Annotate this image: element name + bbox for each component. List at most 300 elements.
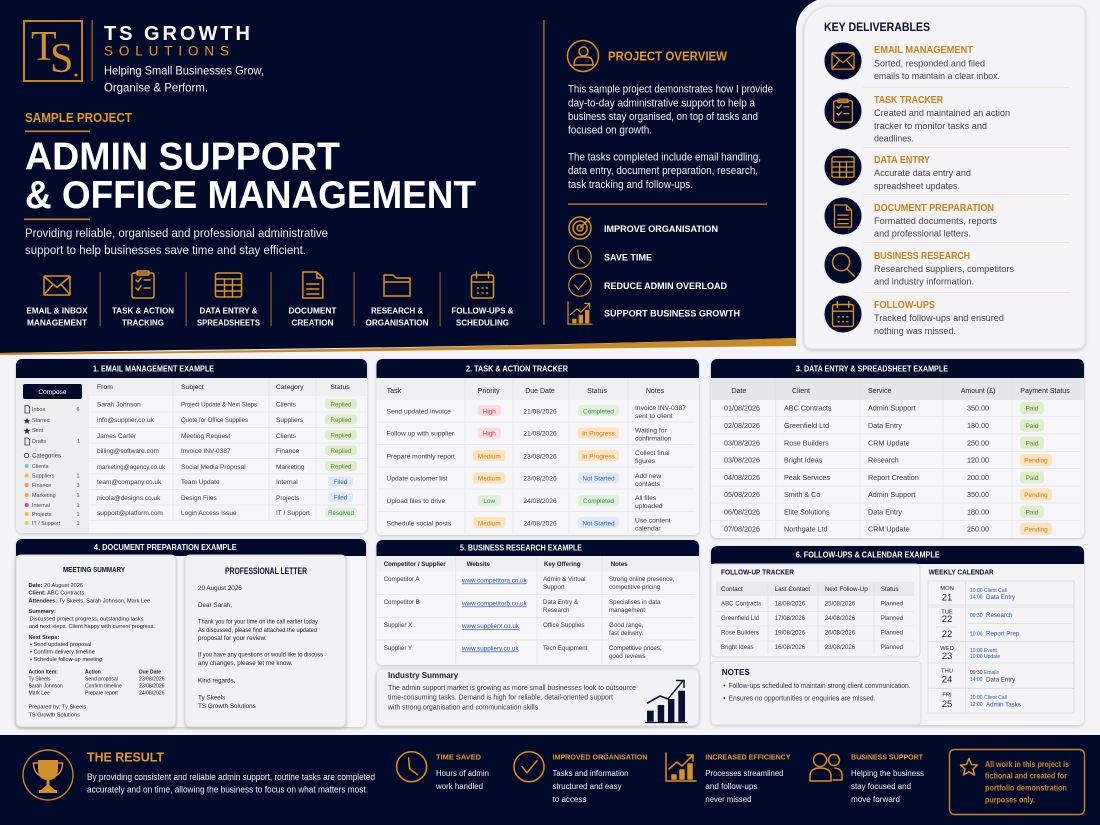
task table: 24/08/2026 — [523, 498, 557, 505]
result: business support: BUSINESS SUPPORT — [851, 752, 924, 761]
spreadsheet table: Report Creation — [868, 473, 919, 482]
meeting summary card: Prepared by: Ty Skeels — [28, 704, 86, 710]
panel 1: email management — [16, 359, 367, 533]
meeting summary card: • Schedule follow-up meeting — [30, 657, 102, 663]
result: improved organisation: structured and easy — [552, 782, 622, 791]
calendar events: Client Call — [984, 588, 1007, 594]
research table: Competitor B — [384, 599, 420, 606]
weekly calendar — [928, 568, 1074, 713]
priority and status pills: Completed — [583, 408, 614, 415]
deliverable text: FOLLOW-UPS — [874, 300, 935, 311]
sidebar — [16, 378, 89, 533]
calendar events: 10:00 — [970, 588, 983, 594]
result: time saved: TIME SAVED — [436, 752, 481, 761]
email table: Subject — [181, 384, 204, 391]
deliverable text: Accurate data entry and — [874, 168, 971, 178]
notes column: Add new — [635, 473, 661, 480]
icon: email — [832, 53, 854, 69]
research table: fast delivery. — [609, 630, 644, 637]
icon: person — [568, 40, 598, 72]
meeting summary card: Next Steps: — [28, 635, 59, 641]
meeting summary card: TS Growth Solutions — [28, 712, 80, 718]
priority and status pills: Not Started — [582, 476, 615, 483]
priority and status pills: Medium — [478, 453, 501, 460]
sidebar: Compose — [38, 389, 67, 396]
task table: 23/08/2026 — [523, 453, 557, 460]
website links: www.competitora.co.uk — [461, 578, 528, 584]
deliverable text: spreadsheet updates. — [874, 181, 960, 191]
panel: key deliverables — [804, 6, 1085, 349]
icon: task — [834, 99, 852, 122]
professional letter card: proposal for your review. — [198, 635, 267, 642]
follow-up tracker: Planned — [881, 630, 903, 636]
follow-up tracker: 23/08/2026 — [825, 644, 856, 651]
notes column: uploaded — [635, 503, 663, 510]
task table: Send updated invoice — [386, 408, 451, 415]
overview text: This sample project demonstrates how I provide — [568, 84, 773, 96]
deliverable text — [874, 45, 1014, 336]
status pills: Replied — [331, 432, 352, 440]
result: improved organisation — [514, 752, 648, 804]
spreadsheet table: CRM Update — [868, 438, 910, 447]
icon: spreadsheet — [216, 273, 242, 297]
brand name: Helping Small Businesses Grow, — [104, 64, 264, 78]
sidebar: Internal — [32, 503, 50, 509]
sidebar: Finance — [32, 483, 51, 489]
research table: Notes — [611, 561, 628, 568]
research table: Research — [543, 607, 570, 614]
notes column: Use content — [635, 518, 671, 524]
spreadsheet table: Client — [792, 388, 810, 395]
calendar events: 14:00 — [970, 677, 983, 683]
professional letter card: Ty Skeels — [198, 694, 225, 702]
benefit list: IMPROVE ORGANISATION — [604, 223, 718, 234]
meeting summary card: Confirm timeline — [85, 684, 122, 690]
icon: search — [833, 254, 854, 276]
email table: support@platform.com — [97, 510, 163, 517]
result: improved organisation: to access — [552, 795, 586, 804]
sidebar: 3 — [76, 483, 80, 489]
notes column: confirmation — [635, 436, 672, 442]
notes column: calendar — [635, 526, 661, 532]
icon: growth chart — [645, 680, 687, 722]
service labels: SCHEDULING — [456, 318, 509, 328]
email table: Status — [330, 384, 350, 391]
panel header: 4. DOCUMENT PREPARATION EXAMPLE — [94, 542, 237, 552]
research table: Website — [467, 561, 491, 568]
email table: Marketing — [276, 464, 305, 471]
disclaimer box: portfolio demonstration — [985, 784, 1067, 792]
notes column — [635, 405, 686, 532]
deliverable text: deadlines. — [874, 134, 914, 144]
status pills: Filed — [334, 479, 348, 486]
calendar days: 22 — [942, 629, 952, 640]
priority and status pills: High — [483, 431, 496, 438]
email table: Sarah Johnson — [97, 402, 141, 408]
research table — [377, 556, 699, 664]
research table: competitive pricing — [609, 584, 661, 591]
notes: Ensures no opportunities or enquiries are missed. — [728, 694, 876, 703]
research table: Competitive prices, — [609, 645, 662, 652]
sample project label — [25, 110, 132, 132]
task table: Schedule social posts — [386, 520, 452, 527]
task table: 21/08/2026 — [523, 408, 557, 415]
status pills: Resolved — [328, 510, 354, 517]
spreadsheet table: Peak Services — [784, 473, 830, 482]
result: increased efficiency: Processes streamlined — [705, 769, 783, 778]
industry summary: The admin support market is growing as more small businesses look to outsource — [388, 683, 636, 692]
notes: Follow-ups scheduled to maintain strong client communication. — [728, 681, 910, 690]
brand name: SOLUTIONS — [104, 44, 229, 58]
spreadsheet table: Rose Builders — [784, 438, 829, 447]
task table — [377, 378, 699, 533]
panel 6: follow-ups and calendar — [711, 546, 1084, 725]
task table: 24/08/2026 — [523, 520, 557, 527]
result: improved organisation: IMPROVED ORGANISATION — [552, 752, 648, 761]
meeting summary card: MEETING SUMMARY — [63, 565, 125, 574]
result: time saved: work handled — [435, 782, 483, 791]
follow-up tracker: Bright Ideas — [721, 644, 754, 651]
disclaimer box: purposes only. — [985, 796, 1035, 804]
sidebar: 6 — [76, 407, 80, 413]
website links: www.supplierx.co.uk — [461, 623, 520, 630]
task table: 23/08/2026 — [523, 476, 557, 483]
service labels: FOLLOW-UPS & — [452, 306, 514, 316]
payment pills: Pending — [1024, 527, 1048, 534]
icon: calendar — [833, 302, 853, 326]
website links — [461, 578, 528, 652]
email table: info@supplier.co.uk — [97, 417, 155, 424]
task table: Due Date — [525, 388, 555, 395]
follow-up tracker: 19/08/2026 — [775, 630, 806, 636]
spreadsheet table: Amount (£) — [961, 388, 995, 395]
panel header: 6. FOLLOW-UPS & CALENDAR EXAMPLE — [796, 550, 940, 560]
payment pills: Paid — [1026, 440, 1039, 447]
notes column: All files — [635, 495, 657, 502]
deliverable text: emails to maintain a clear inbox. — [874, 71, 1000, 81]
follow-up tracker: Greenfield Ltd — [721, 615, 759, 622]
spreadsheet table: Smith & Co — [784, 490, 820, 499]
sidebar: Marketing — [32, 493, 56, 499]
spreadsheet table: 06/08/2026 — [724, 507, 760, 516]
priority and status pills: Medium — [478, 520, 501, 527]
industry summary: Industry Summary — [388, 671, 459, 680]
result text: accurately and on time, allowing the business to focus on what matters most. — [87, 784, 368, 794]
email table: Project Update & Next Steps — [181, 402, 258, 408]
description: Providing reliable, organised and professional administrative — [25, 226, 328, 240]
meeting summary card: Due Date — [139, 670, 161, 676]
email table: Team Update — [181, 479, 220, 486]
sidebar: Starred — [32, 418, 50, 424]
research table: Admin & Virtual — [543, 576, 586, 583]
email table: Meeting Request — [181, 433, 230, 440]
calendar events: 10:00 — [970, 648, 983, 654]
spreadsheet table: 250.00 — [967, 525, 989, 534]
research table: Good range, — [609, 622, 644, 629]
brand name — [104, 23, 264, 94]
industry summary: with strong organisation and communication skills. — [387, 702, 540, 712]
service labels: TASK & ACTION — [112, 306, 174, 316]
task table: Follow up with supplier — [386, 431, 455, 438]
result: time saved — [397, 752, 489, 791]
calendar events: Client Call — [984, 695, 1007, 701]
deliverable text: Sorted, responded and filed — [874, 58, 985, 68]
calendar events: Research — [986, 612, 1013, 619]
website links: www.competitorb.co.uk — [461, 600, 528, 608]
research table: good reviews — [609, 653, 645, 660]
priority and status pills: In Progress — [582, 431, 615, 438]
service labels — [26, 306, 514, 328]
payment pills: Pending — [1024, 458, 1048, 465]
overview text: The tasks completed include email handling, — [568, 152, 761, 164]
email table: From — [97, 384, 113, 391]
notes column: figures — [635, 458, 656, 465]
spreadsheet table — [711, 378, 1084, 537]
professional letter card: If you have any questions or would like to discuss — [198, 652, 323, 658]
logo: T — [31, 24, 57, 70]
meeting summary card: Sarah Johnson — [28, 684, 63, 690]
panel header — [16, 539, 366, 556]
follow-up tracker: FOLLOW-UP TRACKER — [721, 568, 794, 576]
benefit list: SAVE TIME — [604, 252, 652, 262]
follow-up tracker — [711, 564, 920, 657]
deliverable text: DATA ENTRY — [874, 155, 930, 166]
deliverable text: and industry information. — [874, 276, 974, 286]
spreadsheet table: Service — [868, 388, 891, 395]
follow-up tracker: 17/08/2026 — [775, 615, 806, 622]
panel header — [711, 546, 1084, 564]
priority and status pills: Completed — [583, 498, 614, 505]
service labels: MANAGEMENT — [27, 318, 88, 328]
sidebar: Categories — [32, 454, 61, 460]
brand name: Organise & Perform. — [104, 80, 208, 94]
overview text — [568, 84, 773, 191]
overview text: data entry, document preparation, research, — [568, 165, 758, 177]
disclaimer box: All work in this project is — [985, 760, 1069, 769]
deliverable text: Tracked follow-ups and ensured — [874, 313, 1004, 323]
follow-up tracker: Planned — [881, 644, 903, 651]
task table: Status — [587, 388, 607, 395]
research table: Office Supplies — [543, 622, 585, 629]
description: support to help businesses save time and stay efficient. — [25, 243, 306, 257]
deliverable text: Formatted documents, reports — [874, 216, 997, 226]
email table: Clients — [276, 433, 297, 440]
spreadsheet table: Northgate Ltd — [784, 525, 828, 534]
deliverable text: BUSINESS RESEARCH — [874, 251, 970, 262]
status pills — [325, 399, 357, 518]
result heading: THE RESULT — [87, 750, 164, 765]
meeting summary card — [16, 555, 176, 727]
meeting summary card: 23/08/2026 — [139, 676, 165, 682]
panel header — [376, 540, 699, 556]
spreadsheet table: 03/08/2026 — [724, 456, 760, 465]
result: business support: stay focused and — [851, 782, 911, 791]
industry summary: time-consuming tasks. Demand is high for reliable, detail-oriented support — [388, 692, 614, 702]
task table: 21/08/2026 — [523, 431, 557, 438]
spreadsheet table: Admin Support — [868, 404, 916, 413]
sidebar: Drafts — [32, 439, 47, 445]
email table: billing@software.com — [97, 448, 159, 455]
weekly calendar: WEEKLY CALENDAR — [929, 568, 994, 576]
result: increased efficiency: INCREASED EFFICIENCY — [705, 752, 791, 761]
panel 3: data entry — [711, 359, 1084, 538]
spreadsheet table: 02/08/2026 — [724, 421, 760, 430]
professional letter card: Thank you for your time on the call earlier today. — [198, 618, 319, 626]
service labels: CREATION — [292, 318, 334, 328]
follow-up tracker: Planned — [881, 600, 903, 608]
meeting summary card: Ty Skeels — [28, 676, 51, 682]
calendar events: 10:00 — [970, 695, 983, 701]
panel header — [376, 359, 699, 378]
result: increased efficiency: and follow-ups — [705, 782, 757, 791]
spreadsheet table: 07/08/2026 — [724, 525, 760, 534]
calendar events: Update — [984, 654, 1000, 660]
sample project label: SAMPLE PROJECT — [25, 110, 132, 125]
sidebar: Clients — [32, 464, 49, 470]
spreadsheet table: 350.00 — [967, 404, 989, 413]
follow-up tracker: 18/08/2026 — [775, 600, 806, 608]
deliverable text: tracker to monitor tasks and — [874, 121, 987, 131]
service labels: EMAIL & INBOX — [26, 306, 88, 316]
email table: Login Access Issue — [181, 510, 237, 517]
panel 5: business research — [376, 540, 699, 665]
calendar days: TUE — [941, 610, 953, 616]
email table: Finance — [276, 448, 300, 455]
header background — [0, 0, 817, 355]
icon: document — [303, 272, 323, 298]
spreadsheet table: Admin Support — [868, 490, 916, 499]
calendar events: 09:30 — [970, 670, 983, 676]
spreadsheet table: Bright Ideas — [784, 456, 823, 465]
result text: By providing consistent and reliable admin support, routine tasks are completed — [87, 772, 375, 782]
panel header: 2. TASK & ACTION TRACKER — [466, 364, 569, 374]
email table: Quote for Office Supplies — [181, 417, 249, 424]
overview text: day-to-day administrative support to help a — [568, 98, 755, 110]
spreadsheet table: Elite Solutions — [784, 507, 830, 516]
spreadsheet table: 200.00 — [967, 473, 989, 482]
service labels: DATA ENTRY & — [200, 306, 258, 316]
sidebar: 1 — [76, 521, 80, 527]
calendar events: Admin Tasks — [986, 702, 1021, 708]
professional letter card: Dear Sarah, — [198, 602, 232, 609]
logo — [24, 20, 93, 82]
spreadsheet table: 180.00 — [967, 421, 989, 430]
result: improved organisation: Tasks and information — [552, 769, 628, 778]
notes column: Collect final — [635, 450, 670, 457]
follow-up tracker: Rose Builders — [721, 630, 759, 636]
email table — [89, 378, 367, 520]
follow-up tracker: ABC Contracts — [721, 600, 761, 608]
icon: folder — [384, 275, 410, 296]
sidebar: Suppliers — [32, 474, 55, 480]
email table: Social Media Proposal — [181, 464, 246, 471]
follow-up tracker: 24/08/2026 — [825, 615, 856, 622]
meeting summary card: Date: 20 August 2026 — [28, 583, 83, 589]
panel: key deliverables: KEY DELIVERABLES — [824, 22, 930, 34]
research table: Strong online presence, — [609, 576, 675, 583]
calendar days: 25 — [942, 699, 952, 710]
sidebar: 1 — [76, 503, 80, 509]
notes: • — [723, 681, 726, 690]
notes column: sent to client — [635, 413, 673, 420]
sidebar: 1 — [77, 439, 80, 445]
email table: nicola@designs.co.uk — [97, 495, 161, 502]
meeting summary card: Send proposal — [85, 676, 118, 682]
result: business support: move forward — [851, 795, 900, 804]
icon: calendar — [472, 272, 494, 298]
notes column: Waiting for — [635, 428, 667, 434]
panel header — [16, 359, 367, 378]
meeting summary card: Action Item: — [28, 670, 58, 676]
icon: email — [44, 276, 70, 295]
overview text: business stay organised, on top of tasks and — [568, 111, 758, 123]
sidebar: IT / Support — [32, 521, 61, 527]
calendar events: Event — [984, 648, 997, 654]
task table: Task — [387, 388, 402, 395]
service labels: ORGANISATION — [366, 318, 428, 328]
panel header: 3. DATA ENTRY & SPREADSHEET EXAMPLE — [796, 364, 948, 374]
professional letter card: any changes, please let me know. — [198, 660, 293, 667]
spreadsheet table: 03/08/2026 — [724, 438, 760, 447]
panel 4: document preparation — [16, 539, 366, 727]
priority and status pills: Medium — [478, 476, 501, 483]
email table: Design Files — [181, 495, 218, 502]
meeting summary card: Mark Lee — [28, 690, 50, 696]
email table: Suppliers — [276, 417, 304, 424]
follow-up tracker: 26/08/2026 — [825, 630, 856, 636]
sidebar: 1 — [76, 493, 80, 499]
calendar days: WED — [940, 646, 954, 652]
benefit list: REDUCE ADMIN OVERLOAD — [604, 280, 727, 291]
panel 2: task tracker — [376, 359, 699, 535]
benefit list: SUPPORT BUSINESS GROWTH — [604, 308, 740, 318]
follow-up tracker: 25/08/2026 — [825, 600, 856, 608]
sidebar: 1 — [76, 474, 80, 480]
calendar days — [940, 586, 954, 710]
deliverable text: DOCUMENT PREPARATION — [874, 203, 994, 214]
calendar days: 23 — [942, 651, 952, 662]
task table: Prepare monthly report — [386, 453, 455, 460]
meeting summary card: Attendees: Ty Skeels, Sarah Johnson, Mark Lee — [28, 598, 150, 604]
result: business support — [810, 752, 924, 804]
spreadsheet table: 120.00 — [967, 456, 989, 465]
task table: Notes — [646, 388, 665, 395]
calendar events: 10:00 — [970, 654, 983, 660]
email table: James Carter — [97, 433, 137, 440]
email table: team@company.co.uk — [97, 479, 162, 486]
spreadsheet table: 01/08/2026 — [724, 404, 760, 413]
spreadsheet table: Data Entry — [868, 507, 902, 516]
sidebar: Sent — [32, 428, 44, 434]
notes column: contacts — [635, 481, 661, 488]
calendar events — [970, 588, 1021, 708]
calendar events: 14:00 — [970, 595, 983, 601]
priority and status pills: Low — [483, 498, 496, 505]
spreadsheet table: 180.00 — [967, 507, 989, 516]
logo: S — [50, 36, 73, 82]
meeting summary card: Summary: — [28, 609, 56, 615]
calendar days: 24 — [942, 674, 952, 686]
service labels: DOCUMENT — [288, 306, 337, 316]
panel header — [711, 359, 1084, 378]
calendar days: 21 — [942, 592, 952, 604]
payment pills — [1020, 402, 1052, 535]
follow-up tracker: Planned — [881, 615, 903, 622]
overview heading: PROJECT OVERVIEW — [608, 50, 727, 64]
professional letter card — [185, 555, 346, 727]
task table: Update customer list — [386, 476, 448, 483]
deliverable text: Created and maintained an action — [874, 108, 1010, 118]
